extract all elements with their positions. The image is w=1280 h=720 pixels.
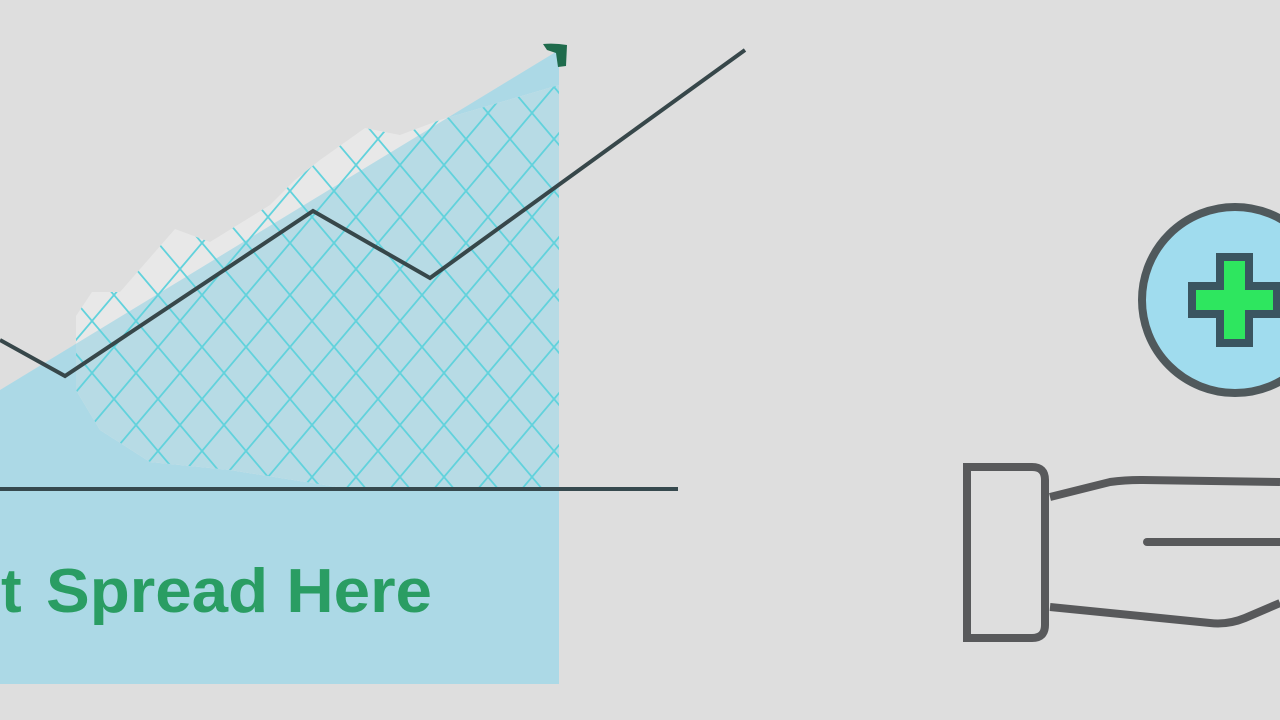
heading: Spread Here [46, 557, 432, 626]
hand top edge [1050, 480, 1280, 497]
hand bottom edge [1050, 603, 1280, 623]
shaded area [0, 50, 559, 684]
hatch overlay [76, 85, 559, 487]
finger line [1147, 538, 1280, 546]
arrow tip [543, 44, 567, 67]
trend line [0, 50, 745, 376]
cross [1192, 257, 1277, 343]
panel: chart area [0, 44, 745, 684]
cuff [967, 467, 1045, 638]
circle [1142, 207, 1280, 393]
icon: medical circle with cross [1142, 207, 1280, 393]
heading: t [1, 557, 22, 626]
icon: hand [967, 467, 1280, 638]
baseline [0, 487, 678, 491]
